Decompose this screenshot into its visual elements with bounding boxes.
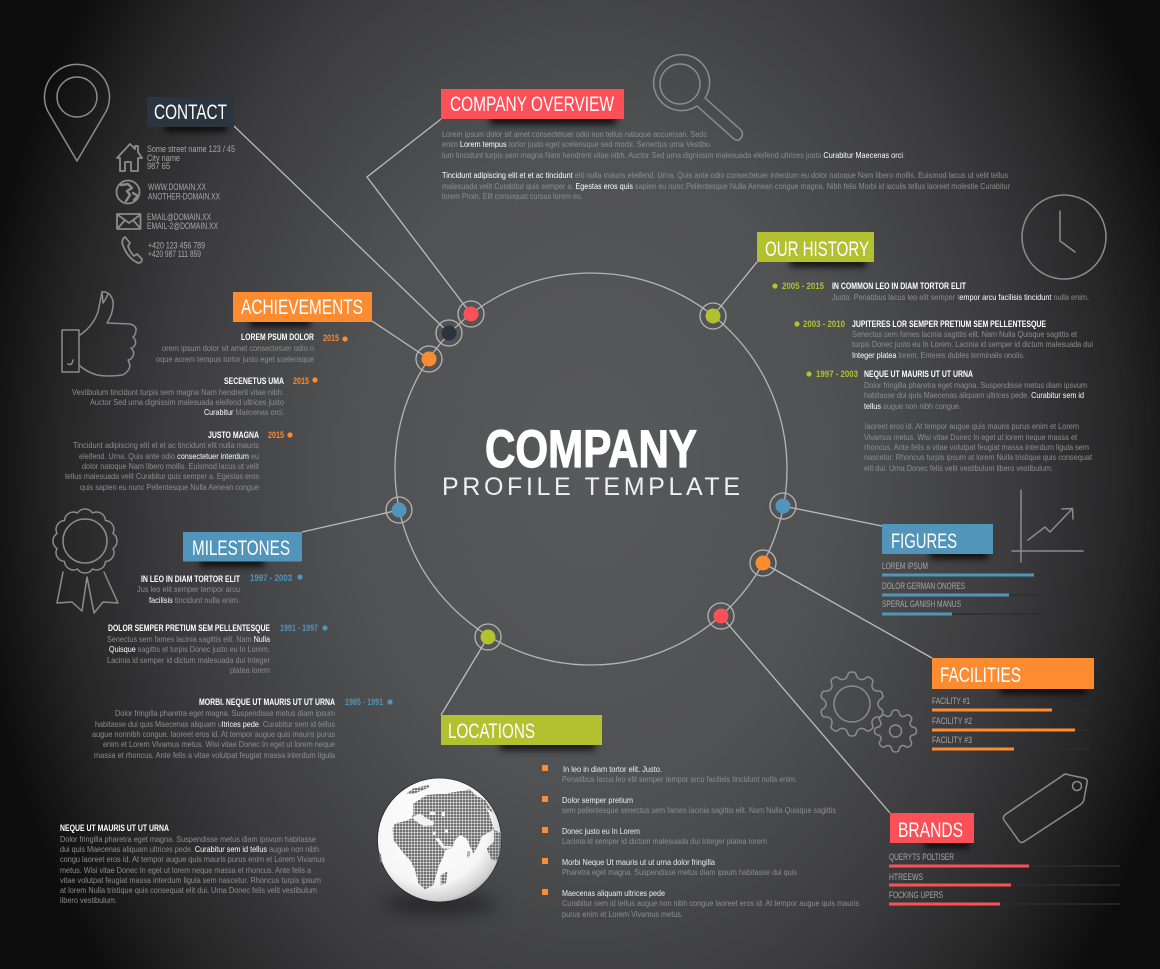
milestone item 1997 - 2003: Jus leo elit semper tempor arcu: [137, 584, 240, 594]
history item 1997 - 2003: rhoncus. Ante felis a vitae volutpat feugiat massa interdum ligula sem: [864, 442, 1089, 452]
history item 1997 - 2003: NEQUE UT MAURIS UT UT URNA: [864, 369, 974, 379]
location list item 5: Curabitur sem id tellus augue non nibh congue laoreet eros id. At tempor augue quis mauris: [562, 898, 859, 908]
history item 2003 - 2010: turpis Donec justo eu In Lorem. Lacinia id semper id dictum malesuada dui: [852, 339, 1093, 349]
bar: facility 3: [932, 735, 1089, 750]
text block: neque ut mauris: dui quis Maecenas aliquam ultrices pede. Curabitur sem id tellus augue non nibh: [60, 844, 319, 854]
bar: facility 1: FACILITY #1: [932, 696, 970, 706]
milestone item 1991 - 1997: DOLOR SEMPER PRETIUM SEM PELLENTESQUE: [108, 623, 270, 633]
location list item 4: Morbi Neque Ut mauris ut ut urna dolor fringilla: [562, 857, 715, 867]
achievement item 3: [65, 430, 293, 492]
milestone item 1985 - 1991: enim et Lorem Vivamus metus. Wisi vitae Donec In eget ut lorem neque: [103, 739, 335, 749]
achievement item 3: tellus malesuada velit Curabitur quis semper a. Egestas eros: [65, 471, 259, 481]
location list item 3: Donec justo eu In Lorem: [562, 826, 640, 836]
history item 2003 - 2010: [794, 319, 1093, 360]
bar: lorem ipsum: [882, 561, 1040, 576]
location list item 5: [542, 888, 859, 919]
bar: focking upers: [889, 890, 1120, 906]
achievement item 3: 2015: [268, 430, 284, 440]
text: phone: +420 987 111 859: [148, 249, 201, 259]
milestone item 1985 - 1991: massa et rhoncus. Ante felis a vitae volutpat feugiat massa interdum ligula: [94, 750, 335, 760]
milestone item 1991 - 1997: Lacinia id semper id dictum malesuada dui Integer: [107, 655, 270, 665]
location list item 1: Penatibus lacus leo elit semper tempor arcu facilisis tincidunt nulla enim.: [562, 774, 797, 784]
milestone item 1997 - 2003: [137, 573, 303, 605]
node: history: [700, 303, 726, 329]
panel: figures: [882, 490, 1083, 616]
bar: facility 1: [932, 696, 1089, 712]
location list item 3: Lacinia id semper id dictum malesuada dui Integer platea lorem: [562, 836, 767, 846]
heading: contact: CONTACT: [154, 101, 227, 124]
heading: our history: OUR HISTORY: [765, 238, 869, 261]
history item 1997 - 2003: tellus augue non nibh congue.: [864, 401, 961, 411]
text block: neque ut mauris: Dolor fringilla pharetra eget magna. Suspendisse metus diam ipsvum habitasse: [60, 834, 316, 844]
node: overview: [458, 301, 484, 327]
achievement item 2: Vestibulum tincidunt turpis sem magna Nam hendrerit vitae nibh.: [72, 387, 284, 397]
history item 2005 - 2015: 2005 - 2015: [782, 281, 824, 291]
history item 2005 - 2015: IN COMMON LEO IN DIAM TORTOR ELIT: [832, 281, 966, 291]
text: web: WWW.DOMAIN.XX: [148, 182, 206, 192]
heading: facilities: [932, 658, 1094, 694]
bar: facility 2: FACILITY #2: [932, 716, 972, 726]
node: facilities: [750, 550, 776, 576]
history item 2003 - 2010: 2003 - 2010: [803, 319, 845, 329]
panel: brands: [889, 774, 1120, 906]
icon: gears: [819, 672, 916, 752]
history item 1997 - 2003: nascetur. Rhoncus turpis ipsum at lorem Nulla tristique quis consequat: [864, 452, 1093, 462]
heading: achievements: ACHIEVEMENTS: [241, 296, 363, 319]
history item 2003 - 2010: Integer platea lorem. Enteres dubles terminalis onolis.: [852, 350, 1025, 360]
panel: milestones: [53, 509, 393, 760]
icon: thumbs up: [62, 292, 136, 376]
milestone item 1991 - 1997: 1991 - 1997: [280, 623, 318, 633]
text: phone: +420 123 456 789: [148, 240, 205, 250]
heading: figures: [882, 524, 993, 559]
heading: our history: [757, 232, 874, 267]
node: achievements: [416, 346, 442, 372]
bar: htreews: HTREEWS: [889, 872, 923, 882]
achievement item 2: Auctor Sed urna dignissim malesuada eleifend ultrices justo: [90, 397, 284, 407]
milestone item 1985 - 1991: MORBI. NEQUE UT MAURIS UT UT URNA: [199, 697, 336, 707]
text: web: ANOTHER-DOMAIN.XX: [148, 192, 220, 202]
location list item 5: Maecenas aliquam ultrices pede: [562, 888, 665, 898]
icon: envelope: [117, 214, 140, 229]
panel: contact: [44, 64, 235, 263]
achievement item 1: 2015: [323, 333, 339, 343]
milestone item 1985 - 1991: habitasse dui quis Maecenas aliquam ultrices pede. Curabitur sem id tellus: [95, 719, 335, 729]
text: overview paragraphs: lum tincidunt turpis sem magna Nam hendrerit vitae nibh. Auctor Sed urna dignissim malesuada eleifend ultrices justo Curabitur Maecenas orci.: [442, 150, 905, 160]
heading: achievements: [233, 292, 372, 327]
milestone item 1991 - 1997: Quisque sagittis et turpis Donec justo eu In Lorem.: [109, 644, 270, 654]
text: phone: [148, 240, 205, 259]
text: overview paragraphs: enim Lorem tempus tortor justo eget scelerisque sed morbi. Senectus urna Vestibu: [442, 139, 710, 149]
title: PROFILE TEMPLATE: [442, 473, 740, 501]
history item 1997 - 2003: elit dui. Urna Donec felis velit vestibulum libero vestibulum.: [864, 463, 1053, 473]
milestone item 1991 - 1997: platea lorem: [230, 665, 270, 675]
text: address: [147, 144, 235, 171]
history item 1997 - 2003: laoreet eros id. At tempor augue quis mauris purus enim et Lorem: [865, 421, 1079, 431]
milestone item 1991 - 1997: [107, 623, 328, 675]
text: email: [147, 212, 218, 231]
milestone item 1985 - 1991: Dolor fringilla pharetra eget magna. Suspendisse metus diam ipsum: [115, 708, 335, 718]
bar: focking upers: FOCKING UPERS: [889, 890, 943, 900]
history item 1997 - 2003: [806, 369, 1093, 473]
achievement item 3: quis sapien eu nunc Pellentesque Nulla Aenean congue: [80, 482, 259, 492]
text block: neque ut mauris: metus. Wisi vitae Donec In eget ut lorem neque massa et rhoncus. Ante felis a: [60, 865, 311, 875]
panel: achievements: [62, 292, 372, 492]
heading: company overview: COMPANY OVERVIEW: [450, 93, 614, 116]
text block: neque ut mauris: at lorem Nulla tristique quis consequat elit dui. Urna Donec felis velit vestibulum: [60, 885, 317, 895]
heading: milestones: [183, 532, 302, 567]
connector lines: [234, 119, 932, 813]
node: locations: [475, 624, 501, 650]
heading: locations: LOCATIONS: [448, 720, 535, 743]
text: email: EMAIL@DOMAIN.XX: [147, 212, 211, 222]
location list item 2: sem pellentesque senectus sem fames lacinia sagittis elit. Nam Nulla Quisque sagittis: [562, 805, 836, 815]
location list item 4: [542, 857, 797, 877]
heading: brands: [890, 813, 974, 848]
achievement item 3: Tincidunt adipiscing elit et et ac tincidunt elit nulla mauris: [73, 440, 259, 450]
achievement item 3: JUSTO MAGNA: [208, 430, 260, 440]
text: address: 987 65: [147, 161, 170, 171]
heading: milestones: MILESTONES: [192, 537, 290, 560]
icon: magnifier: [654, 55, 742, 140]
heading: company overview: [441, 89, 624, 125]
bar: dolor german onores: DOLOR GERMAN ONORES: [882, 581, 965, 591]
title: COMPANY: [485, 420, 697, 479]
text: web: [148, 182, 220, 202]
text: address: City name: [147, 153, 180, 163]
icon: rosette: [53, 509, 118, 613]
history item 2003 - 2010: Senectus sem fames lacinia sagittis elit. Nam Nulla Quisque sagittis et: [852, 329, 1078, 339]
heading: brands: BRANDS: [898, 819, 963, 842]
achievement item 2: [72, 376, 318, 417]
icon: growth chart: [1012, 490, 1083, 562]
history item 1997 - 2003: 1997 - 2003: [816, 369, 858, 379]
achievement item 2: 2015: [293, 376, 309, 386]
bar: lorem ipsum: LOREM IPSUM: [882, 561, 928, 571]
icon: map pin: [44, 64, 110, 161]
history item 2003 - 2010: JUPITERES LOR SEMPER PRETIUM SEM PELLENTESQUE: [852, 319, 1046, 329]
milestone item 1985 - 1991: 1985 - 1991: [345, 697, 383, 707]
heading: contact: [147, 97, 234, 132]
achievement item 1: [156, 332, 348, 364]
panel: facilities: [819, 658, 1094, 752]
icon: clock: [1022, 195, 1106, 279]
panel: our history: [757, 195, 1106, 473]
history item 2005 - 2015: [772, 281, 1089, 302]
text: overview paragraphs: Lorem ipsum dolor sit amet consectetuer odio non tellus natoque accumsan. Sedc: [442, 129, 708, 139]
text block: neque ut mauris: libero vestibulum.: [60, 895, 117, 905]
icon: house: [117, 144, 142, 171]
location list item 3: [542, 826, 767, 846]
achievement item 1: LOREM PSUM DOLOR: [241, 332, 314, 342]
milestone item 1985 - 1991: [92, 697, 393, 760]
history item 2005 - 2015: Justo. Penatibus lacus leo elit semper tempor arcu facilisis tincidunt nulla enim.: [832, 292, 1089, 302]
node: contact: [436, 320, 462, 346]
achievement item 2: Curabitur Maecenas orci.: [204, 407, 284, 417]
bar: speral ganish manus: [882, 599, 1040, 616]
location list item 1: [542, 764, 797, 784]
icon: price tag: [1003, 774, 1087, 842]
panel: company overview: [441, 55, 1010, 201]
heading: figures: FIGURES: [891, 530, 957, 553]
panel: locations: [378, 715, 859, 919]
bar: dolor german onores: [882, 581, 1040, 596]
bar: speral ganish manus: SPERAL GANISH MANUS: [882, 599, 961, 609]
text: address: Some street name 123 / 45: [147, 144, 235, 154]
location list item 1: In leo in diam tortor elit. Justo.: [563, 764, 662, 774]
milestone item 1997 - 2003: IN LEO IN DIAM TORTOR ELIT: [141, 574, 240, 584]
bar: queryts poltiser: [889, 852, 1120, 868]
history item 1997 - 2003: Vivamus metus. Wisi vitae Donec In eget ut lorem neque massa et: [864, 432, 1078, 442]
text: overview paragraphs: malesuada velit Curabitur quis semper a. Egestas eros quis sapien eu nunc Pellentesque Nulla Aenean congue magna. Nibh felis Morbi id iaculis tellus laoreet molestie Curabitur: [442, 181, 1010, 191]
text: email: EMAIL-2@DOMAIN.XX: [147, 221, 218, 231]
milestone item 1991 - 1997: Senectus sem fames lacinia sagittis elit. Nam Nulla: [107, 634, 270, 644]
milestone item 1985 - 1991: augue nonnibh congue. laoreet eros id. At tempor augue quis mauris purus: [92, 729, 335, 739]
title: [442, 420, 740, 501]
heading: facilities: FACILITIES: [940, 664, 1021, 687]
history item 1997 - 2003: Dolor fringilla pharetra eget magna. Suspendisse metus diam ipsvum: [864, 380, 1087, 390]
heading: locations: [441, 715, 602, 750]
text block: neque ut mauris: vitae volutpat feugiat massa interdum ligula sem nascetur. Rhoncus turpis ipsum: [60, 875, 321, 885]
text: overview paragraphs: Tincidunt adipiscing elit et et ac tincidunt elit nulla mauris eleifend. Urna. Quis ante odio consectetuer interdum eu dolor natoque Nam libero mollis. Euismod lacus ut velit tellus: [442, 170, 1008, 180]
location list item 2: Dolor semper pretium: [562, 795, 633, 805]
location list item 2: [542, 795, 836, 815]
bar: htreews: [889, 872, 1120, 886]
node: milestones: [386, 497, 412, 523]
text: overview paragraphs: [442, 129, 1010, 201]
milestone item 1997 - 2003: 1997 - 2003: [250, 573, 292, 583]
achievement item 3: dolor natoque Nam libero mollis. Euismod lacus ut velit: [82, 461, 260, 471]
history item 1997 - 2003: habitasse dui quis Maecenas aliquam ultrices pede. Curabitur sem id: [864, 390, 1084, 400]
text block: neque ut mauris: congu laoreet eros id. At tempor augue quis mauris purus enim et Lorem Vivamus: [60, 854, 325, 864]
icon: dotted globe: [378, 778, 502, 912]
achievement item 3: eleifend. Urna. Quis ante odio consectetuer interdum eu: [79, 451, 259, 461]
achievement item 1: oque acrem tempus tortor justo eget scelerisque: [156, 354, 314, 364]
achievement item 1: orem ipsum dolor sit amet consectetuer odio n: [162, 343, 314, 353]
location list item 4: Pharetra eget magna. Suspendisse metus diam ipsum habitasse dui quis: [562, 867, 797, 877]
location list item 5: purus enim et Lorem Vivamus metus.: [562, 909, 683, 919]
central circle: [395, 273, 787, 665]
text block: neque ut mauris: [60, 823, 325, 905]
icon: world: [116, 180, 140, 204]
node: brands: [708, 603, 734, 629]
bar: facility 3: FACILITY #3: [932, 735, 972, 745]
node: figures: [770, 493, 796, 519]
bar: facility 2: [932, 716, 1089, 732]
bar: queryts poltiser: QUERYTS POLTISER: [889, 852, 954, 862]
achievement item 2: SECENETUS UMA: [224, 376, 285, 386]
text block: neque ut mauris: NEQUE UT MAURIS UT UT URNA: [60, 823, 170, 833]
text: overview paragraphs: lorem Proin. Elit consequat cursus lorem eu.: [442, 191, 583, 201]
milestone item 1997 - 2003: facilisis tincidunt nulla enim.: [149, 595, 240, 605]
icon: phone: [122, 237, 142, 263]
